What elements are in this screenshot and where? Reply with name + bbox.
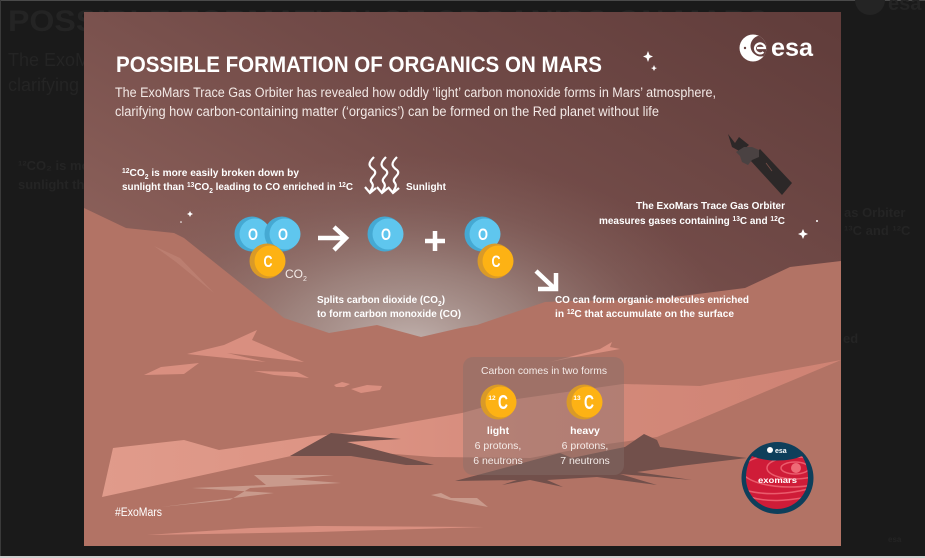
molecule: CO: C	[492, 252, 500, 271]
text: CO forms organics	[555, 294, 749, 320]
panel: carbon forms	[463, 357, 624, 475]
text: orbiter caption: C and	[740, 215, 770, 227]
text: 12CO2 breakdown	[122, 167, 353, 195]
molecule: CO2: O	[278, 225, 288, 244]
background: dimmed page behind panel: as Orbiter	[844, 205, 905, 220]
molecule: CO2: O	[248, 225, 258, 244]
landscape: dark ridge right	[455, 434, 747, 487]
text: orbiter caption: measures gases containing	[599, 215, 737, 227]
landscape: dark ridge left	[290, 433, 434, 465]
molecule: O	[368, 216, 404, 252]
text: splits CO2: to form carbon monoxide (CO)	[317, 308, 461, 320]
text: heavy carbon	[560, 425, 610, 467]
text: heavy carbon: 6 protons,	[562, 440, 608, 452]
text: 12CO2 breakdown: 12	[338, 182, 346, 189]
molecule: CO2	[234, 216, 307, 283]
icon: esa logo	[740, 34, 814, 62]
badge: exomars mission patch	[742, 442, 814, 514]
icon: carbon 12	[480, 384, 516, 420]
text: CO forms organics: in	[555, 308, 564, 320]
hashtag: #ExoMars	[115, 507, 162, 519]
background: dimmed page behind panel: ¹²CO₂ is more	[18, 158, 102, 173]
text: CO forms organics: 12	[567, 309, 574, 316]
horizon glow	[222, 199, 648, 337]
landscape: pink streaks	[144, 330, 620, 535]
subtitle	[115, 85, 716, 119]
molecule: O: O	[381, 225, 391, 244]
molecule: CO: O	[478, 225, 488, 244]
molecule: CO2: C	[264, 252, 272, 271]
text: 12CO2 breakdown: 12	[122, 168, 130, 175]
text: splits CO2: Splits carbon dioxide (CO	[317, 294, 445, 306]
subtitle: The ExoMars Trace Gas Orbiter has revealed how oddly ‘light’ carbon monoxide forms in Mars’ atmosphere,	[115, 85, 716, 100]
landscape: hill scratches	[156, 247, 210, 290]
molecule: CO2: CO	[285, 267, 303, 281]
text: 12CO2 breakdown: sunlight than	[122, 181, 188, 193]
text: orbiter caption	[599, 200, 785, 227]
arrow: to surface	[536, 271, 556, 289]
text: light carbon: 6 protons,	[475, 440, 521, 452]
landscape: pale streaks	[161, 475, 488, 507]
text: splits CO2: )	[442, 294, 445, 306]
icon: trace gas orbiter	[728, 134, 792, 195]
badge: exomars mission patch: exomars	[758, 475, 797, 485]
text: 12CO2 breakdown: is more easily broken down by	[149, 167, 299, 179]
background: dimmed page behind panel: ed	[843, 331, 858, 346]
icon: carbon 13: 13	[573, 395, 581, 402]
background: dimmed page behind panel: POSSIBLE FORMATION OF ORGANICS ON MARS	[8, 5, 768, 38]
arrow: reaction	[318, 227, 346, 250]
text: orbiter caption: 12	[770, 216, 778, 223]
molecule: CO2: 2	[303, 276, 307, 283]
text: 12CO2 breakdown: CO	[194, 181, 209, 193]
background: dimmed page behind panel: clarifying	[8, 75, 79, 95]
text: 12CO2 breakdown: 2	[145, 174, 149, 181]
heading: carbon comes in two forms: Carbon comes in two forms	[481, 365, 607, 377]
molecule: CO	[464, 216, 514, 278]
text: heavy carbon: 7 neutrons	[560, 455, 610, 467]
background: dimmed page behind panel: sunlight than	[18, 177, 100, 192]
text: 12CO2 breakdown: leading to CO enriched in	[213, 181, 338, 193]
text: heavy carbon: heavy	[570, 425, 600, 437]
text: CO forms organics: C that accumulate on the surface	[574, 308, 734, 320]
stars	[180, 51, 818, 239]
text: light carbon: light	[487, 425, 510, 437]
background: dimmed page behind panel: ¹³C and ¹²C	[844, 223, 911, 238]
text: light carbon	[473, 425, 523, 467]
landscape: Mars ground	[84, 208, 841, 546]
title: POSSIBLE FORMATION OF ORGANICS ON MARS	[116, 52, 602, 77]
icon: carbon 13: C	[584, 392, 594, 414]
icon: carbon 13	[566, 384, 602, 420]
icon: carbon 12: 12	[488, 395, 496, 402]
background: dimmed page behind panel: The ExoMars	[8, 50, 115, 70]
text: 12CO2 breakdown: C	[346, 181, 353, 193]
badge: exomars mission patch: esa	[775, 448, 787, 455]
text: splits CO2	[317, 294, 461, 320]
subtitle: clarifying how carbon-containing matter (‘organics’) can be formed on the Red planet without life	[115, 104, 659, 119]
icon: esa logo: esa	[771, 34, 814, 62]
text: orbiter caption: C	[778, 215, 785, 227]
text: 12CO2 breakdown: CO	[130, 167, 145, 179]
text: 12CO2 breakdown: 2	[209, 188, 213, 195]
background: dimmed page behind panel: esa	[888, 535, 902, 544]
panel: infographic illustration	[84, 12, 841, 546]
landscape: light band	[102, 360, 841, 497]
text: orbiter caption: The ExoMars Trace Gas Orbiter	[636, 200, 785, 212]
text: splits CO2: 2	[438, 301, 442, 308]
label: sunlight: Sunlight	[406, 181, 446, 193]
text: orbiter caption: 13	[733, 216, 740, 223]
sky	[84, 12, 841, 337]
text: 12CO2 breakdown: 13	[187, 182, 194, 189]
icon: plus	[425, 231, 445, 251]
icon: sunlight wavy arrows	[365, 157, 399, 193]
icon: carbon 12: C	[498, 392, 508, 414]
text: CO forms organics: CO can form organic molecules enriched	[555, 294, 749, 306]
text: light carbon: 6 neutrons	[473, 455, 523, 467]
